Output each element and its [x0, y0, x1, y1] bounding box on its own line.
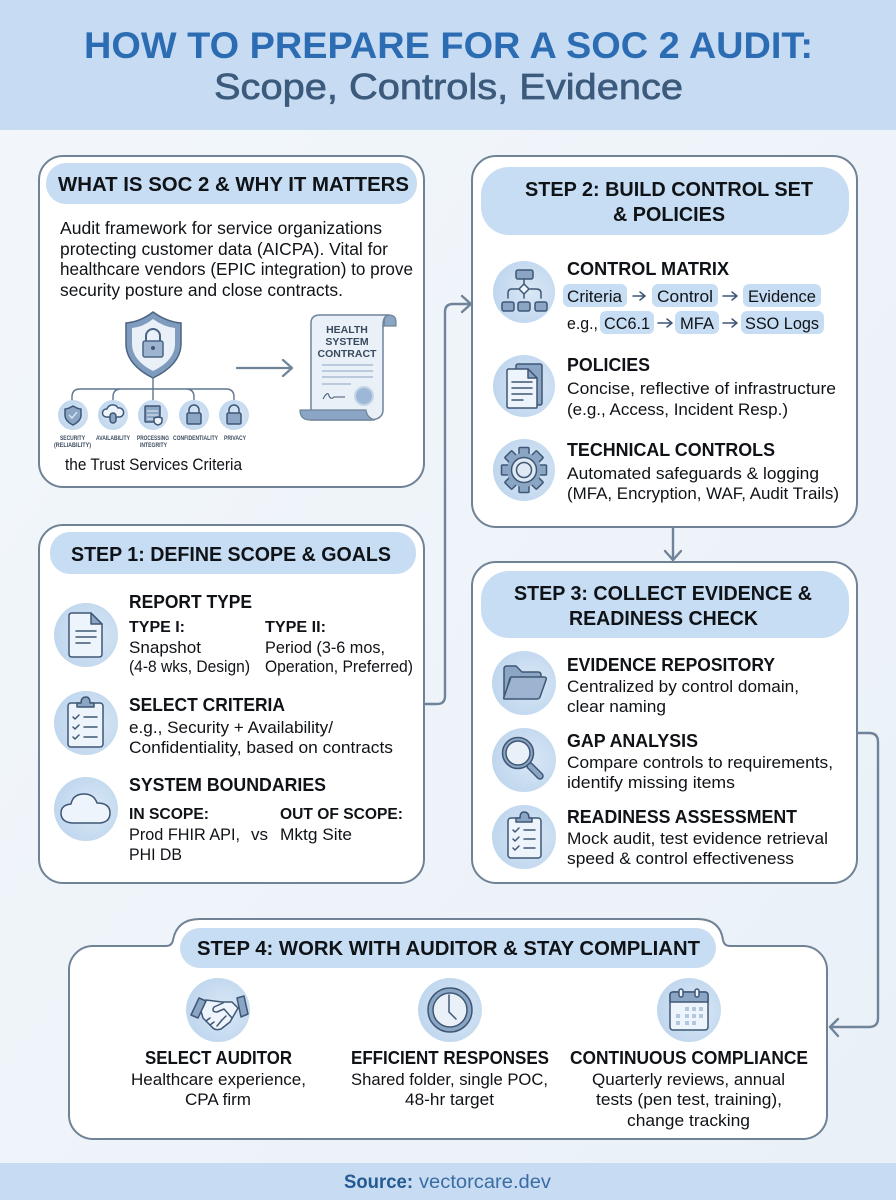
arrow: step 2 to step 3: [665, 527, 681, 560]
select auditor: [131, 1048, 306, 1109]
continuous compliance: [570, 1048, 808, 1130]
control matrix: e.g.,: [567, 314, 598, 333]
report type: REPORT TYPE: [129, 592, 252, 612]
report type: Snapshot: [129, 638, 201, 657]
criteria labels: PRIVACY: [224, 435, 247, 442]
heading: step 1: STEP 1: DEFINE SCOPE & GOALS: [71, 543, 391, 566]
system boundaries: OUT OF SCOPE:: [280, 806, 403, 823]
select auditor: SELECT AUDITOR: [145, 1048, 292, 1068]
report type: Operation, Preferred): [265, 657, 413, 676]
icon: clipboard checklist: [54, 691, 118, 755]
criteria labels: AVAILABILITY: [96, 435, 131, 442]
icon: policies documents: [493, 355, 555, 417]
efficient responses: 48-hr target: [405, 1090, 494, 1109]
text block: SOC 2 description: security posture and close contracts.: [60, 280, 343, 300]
icon: health system contract scroll: [300, 315, 396, 420]
continuous compliance: tests (pen test, training),: [596, 1090, 782, 1109]
heading: step 4: [180, 928, 716, 968]
icon: calendar: [657, 978, 721, 1042]
icon: cloud: [54, 777, 118, 841]
readiness assessment: Mock audit, test evidence retrieval: [567, 829, 828, 848]
heading: what is SOC 2: [46, 163, 417, 204]
icon: magnifier: [492, 728, 556, 792]
control matrix: [563, 259, 824, 334]
heading: what is SOC 2: WHAT IS SOC 2 & WHY IT MATTERS: [58, 173, 409, 196]
efficient responses: Shared folder, single POC,: [351, 1070, 548, 1089]
technical controls: [567, 440, 839, 503]
control matrix: CC6.1: [604, 314, 650, 333]
report type: TYPE II:: [265, 619, 326, 636]
gap analysis: [567, 731, 833, 792]
system boundaries: Prod FHIR API,: [129, 825, 240, 844]
readiness assessment: speed & control effectiveness: [567, 849, 794, 868]
control matrix: Control: [657, 287, 713, 306]
select criteria: [129, 695, 393, 757]
arrow: step 3 to step 4: [830, 733, 878, 1036]
icon: security criterion: [58, 400, 88, 430]
select criteria: e.g., Security + Availability/: [129, 718, 333, 737]
heading: step 2: STEP 2: BUILD CONTROL SET: [525, 178, 813, 201]
control matrix: MFA: [680, 314, 715, 333]
icon: processing integrity criterion: [138, 400, 168, 430]
system boundaries: vs: [251, 825, 268, 844]
footer: source: vectorcare.dev: [419, 1172, 552, 1193]
heading: step 3: [481, 571, 849, 638]
footer: source: [0, 1163, 896, 1200]
icon: readiness clipboard: [492, 805, 556, 869]
criteria labels: SECURITY: [60, 435, 86, 442]
icon: availability criterion: [98, 400, 128, 430]
icon: shield with lock: [126, 312, 181, 378]
panel: what is SOC 2: [39, 156, 424, 487]
tree connector to criteria: [72, 377, 234, 401]
icon: handshake: [186, 978, 250, 1042]
control matrix: CONTROL MATRIX: [567, 259, 729, 279]
efficient responses: [351, 1048, 549, 1109]
system boundaries: PHI DB: [129, 845, 182, 864]
icon: folder: [492, 651, 556, 715]
control matrix: Criteria: [567, 287, 623, 306]
icon: health system contract scroll: SYSTEM: [325, 336, 369, 348]
technical controls: (MFA, Encryption, WAF, Audit Trails): [567, 484, 839, 503]
text block: SOC 2 description: healthcare vendors (EPIC integration) to prove: [60, 259, 413, 279]
heading: step 3: STEP 3: COLLECT EVIDENCE &: [514, 582, 812, 605]
continuous compliance: CONTINUOUS COMPLIANCE: [570, 1048, 808, 1068]
gap analysis: GAP ANALYSIS: [567, 731, 698, 751]
continuous compliance: change tracking: [627, 1111, 750, 1130]
panel: step 4: [69, 919, 827, 1139]
icon: privacy criterion: [219, 400, 249, 430]
policies: Concise, reflective of infrastructure: [567, 379, 836, 398]
heading: step 2: & POLICIES: [613, 203, 725, 226]
panel: step 2: [472, 156, 857, 527]
text block: SOC 2 description: Audit framework for service organizations: [60, 218, 382, 238]
report type: TYPE I:: [129, 619, 185, 636]
evidence repository: EVIDENCE REPOSITORY: [567, 655, 775, 675]
heading: step 1: [50, 532, 416, 574]
panel: step 1: [39, 525, 424, 883]
text block: SOC 2 description: [60, 218, 413, 300]
footer: source: Source:: [344, 1172, 413, 1193]
subtitle: Scope, Controls, Evidence: [214, 66, 683, 107]
policies: [567, 355, 836, 419]
criteria labels: CONFIDENTIALITY: [173, 435, 219, 442]
heading: step 4: STEP 4: WORK WITH AUDITOR & STAY COMPLIANT: [197, 937, 700, 960]
report type: [129, 592, 413, 676]
system boundaries: IN SCOPE:: [129, 806, 209, 823]
evidence repository: Centralized by control domain,: [567, 677, 799, 696]
icon: report document: [54, 603, 118, 667]
select auditor: Healthcare experience,: [131, 1070, 306, 1089]
readiness assessment: [567, 807, 828, 868]
icon: clock: [418, 978, 482, 1042]
text block: SOC 2 description: protecting customer data (AICPA). Vital for: [60, 239, 388, 259]
caption: trust services criteria: the Trust Services Criteria: [65, 455, 242, 474]
heading: step 2: [481, 167, 849, 235]
arrow: criteria to contract: [237, 360, 292, 376]
control matrix: SSO Logs: [745, 314, 819, 333]
system boundaries: SYSTEM BOUNDARIES: [129, 775, 326, 795]
evidence repository: clear naming: [567, 697, 666, 716]
evidence repository: [567, 655, 799, 716]
select auditor: CPA firm: [185, 1090, 251, 1109]
technical controls: TECHNICAL CONTROLS: [567, 440, 775, 460]
criteria labels: INTEGRITY: [140, 442, 168, 449]
report type: (4-8 wks, Design): [129, 657, 250, 676]
policies: (e.g., Access, Incident Resp.): [567, 400, 788, 419]
control matrix: Evidence: [748, 287, 816, 306]
criteria labels: (RELIABILITY): [54, 442, 91, 449]
icon: control matrix flowchart: [493, 261, 555, 323]
icon: health system contract scroll: CONTRACT: [318, 348, 377, 360]
panel: step 3: [472, 562, 857, 883]
icon: health system contract scroll: HEALTH: [326, 324, 368, 336]
header band: [0, 0, 896, 130]
readiness assessment: READINESS ASSESSMENT: [567, 807, 797, 827]
criteria labels: [54, 435, 247, 449]
criteria labels: PROCESSING: [137, 435, 169, 442]
gap analysis: Compare controls to requirements,: [567, 753, 833, 772]
icon: confidentiality criterion: [179, 400, 209, 430]
gap analysis: identify missing items: [567, 773, 735, 792]
arrow: step 1 to step 2: [424, 296, 471, 704]
technical controls: Automated safeguards & logging: [567, 464, 819, 483]
policies: POLICIES: [567, 355, 650, 375]
efficient responses: EFFICIENT RESPONSES: [351, 1048, 549, 1068]
system boundaries: [129, 775, 403, 864]
heading: step 3: READINESS CHECK: [569, 607, 758, 630]
report type: Period (3-6 mos,: [265, 638, 385, 657]
icon: gear: [493, 439, 555, 501]
continuous compliance: Quarterly reviews, annual: [592, 1070, 785, 1089]
title: HOW TO PREPARE FOR A SOC 2 AUDIT:: [84, 24, 813, 66]
select criteria: SELECT CRITERIA: [129, 695, 285, 715]
system boundaries: Mktg Site: [280, 825, 352, 844]
select criteria: Confidentiality, based on contracts: [129, 738, 393, 757]
